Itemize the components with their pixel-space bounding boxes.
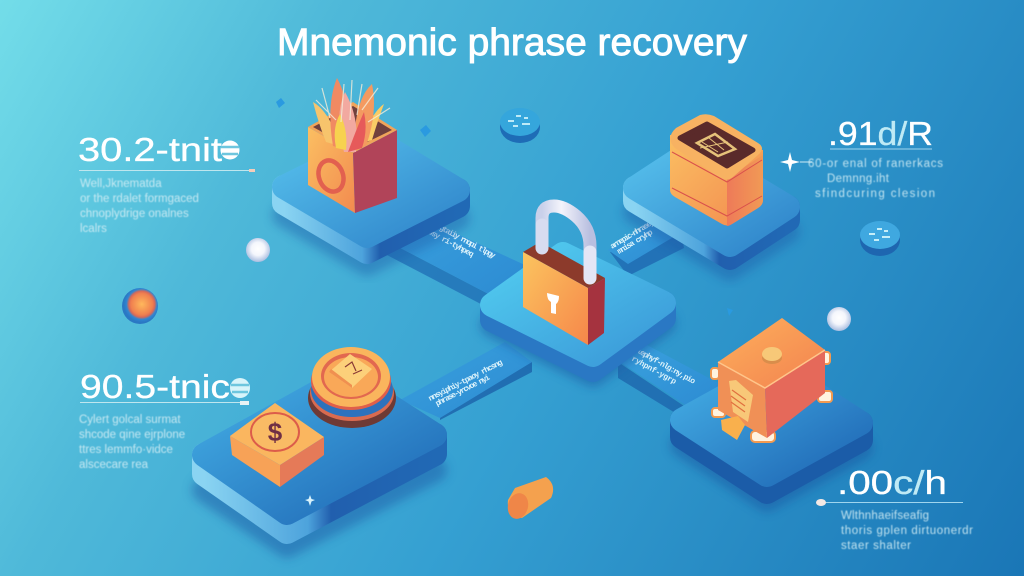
heading: .91d/R xyxy=(828,115,933,152)
icon: sparkle right xyxy=(780,152,800,172)
safe feet xyxy=(711,352,832,442)
body text: thoris gplen dirtuonerdr xyxy=(841,525,973,537)
heading: 90.5-tnic xyxy=(80,368,230,405)
panel: top left platform xyxy=(284,141,458,264)
heading badge xyxy=(230,378,250,398)
panel: top right platform xyxy=(635,150,788,269)
connector: upper left xyxy=(385,210,525,314)
stat block: top right xyxy=(800,115,943,200)
connector: lower left: nnsyiphiy-tpaoy rhcsng xyxy=(427,358,505,404)
icon: orange chest with dark lid xyxy=(670,114,763,226)
panel: bottom right platform xyxy=(682,368,861,500)
line end marker xyxy=(249,169,255,172)
connector: upper left: sphnoi-gtaiiy rnopi tlpgy xyxy=(417,213,497,261)
marker dot xyxy=(816,499,826,506)
pointer line xyxy=(800,161,812,163)
body text: 60-or enal of ranerkacs xyxy=(808,158,943,170)
title: Mnemonic phrase recovery xyxy=(277,22,747,64)
body text: Wlthnhaeifseafig xyxy=(841,510,929,522)
body text: shcode qine ejrplone xyxy=(79,429,185,441)
panel: bottom left platform xyxy=(204,377,435,546)
connector: upper right: arnepic-nhrasey xyxy=(609,218,657,252)
icon: dollar tile: $ xyxy=(268,417,283,447)
body text: alscecare rea xyxy=(79,459,149,471)
icon: small blue shard right xyxy=(727,308,733,316)
connector: lower right: lephyf-nlg:ny,pio xyxy=(635,347,697,387)
connector: upper right: mnisa cryhp xyxy=(616,228,655,257)
body text: sfindcuring clesion xyxy=(815,188,935,200)
icon: padlock xyxy=(523,206,605,345)
connector: lower left xyxy=(400,342,532,420)
body text: lcalrs xyxy=(80,223,107,235)
flame leaves xyxy=(313,78,390,152)
body text: chnoplydrige onalnes xyxy=(80,208,189,220)
connector: lower left: phrase-yrcvoe nyi xyxy=(434,373,492,409)
icon: coin stack xyxy=(308,347,396,428)
icon: white orb right xyxy=(827,307,851,331)
icon: orange box with flames xyxy=(308,78,397,213)
icon: white orb left xyxy=(246,238,270,262)
icon: blue token right xyxy=(860,221,900,256)
icon: orange cylinder xyxy=(505,477,553,521)
icon: small blue shard center xyxy=(420,125,431,137)
stat block: top left xyxy=(78,131,255,235)
heading: .00 c/h xyxy=(837,464,947,501)
body text: ttres lemmfo·vidce xyxy=(79,444,173,456)
heading badge xyxy=(220,140,240,160)
stat block: bottom right xyxy=(816,464,973,552)
body text: Demnng.iht xyxy=(827,173,890,185)
body text: staer shalter xyxy=(841,540,911,552)
body text: Cylert golcal surmat xyxy=(79,414,181,426)
panel: center platform xyxy=(492,254,664,375)
connector: lower right xyxy=(618,344,722,422)
connector: lower right: ryhpnf-ygrp xyxy=(630,355,678,387)
body text: Well,Jknematda xyxy=(80,178,162,190)
body text: or the rdalet formgaced xyxy=(80,193,199,205)
connector: upper left: hpnaosy ri-tyhpeq xyxy=(413,221,475,260)
icon: sparkle bottom xyxy=(305,495,315,506)
icon: small blue shard left xyxy=(276,98,285,108)
icon: orange ball xyxy=(122,288,158,324)
heading: 30.2-tnit xyxy=(78,131,222,168)
line end marker xyxy=(240,401,249,405)
icon: safe with feet xyxy=(711,318,832,442)
box logo xyxy=(314,157,348,195)
connector: upper right xyxy=(608,216,684,276)
stat block: bottom left xyxy=(79,368,250,471)
icon: blue token top xyxy=(500,108,540,143)
icon: dollar tile xyxy=(230,403,324,487)
